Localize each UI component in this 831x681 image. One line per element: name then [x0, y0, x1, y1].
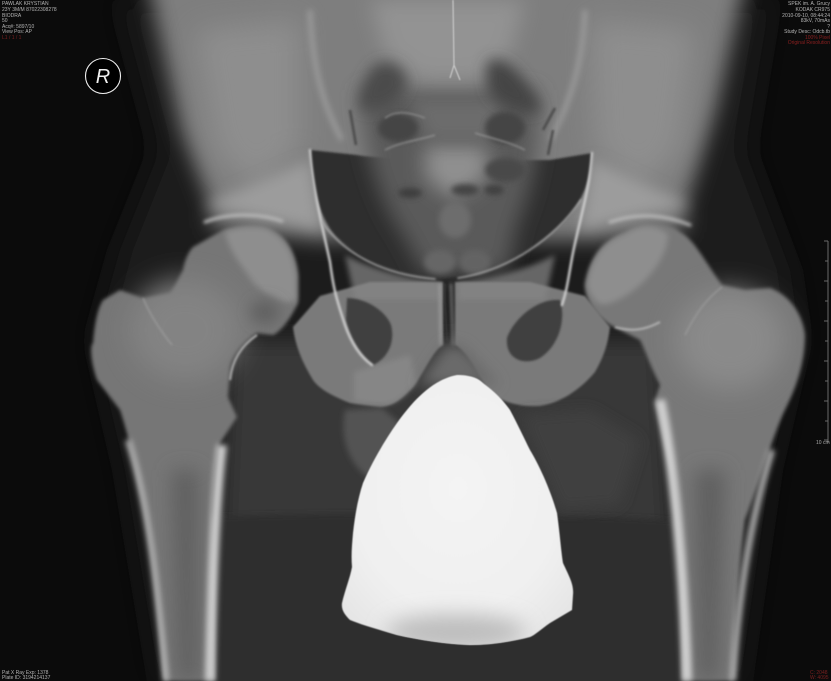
- left femur: [91, 225, 298, 681]
- patient information: BIODRA: [2, 13, 22, 19]
- study information: Study Desc: Odcb.tb: [784, 29, 830, 35]
- window level readout: W: 4095: [810, 675, 829, 681]
- patient information: Acq#: 5897/10: [2, 24, 34, 30]
- patient information: L1 / 1 / 1: [2, 35, 22, 41]
- bright cortical lines: [205, 150, 690, 365]
- pelvic inlet: [310, 150, 592, 278]
- exposure and plate information: Pat X Ray Exp: 1378: [2, 670, 49, 676]
- patient information: 50: [2, 18, 8, 24]
- right femur: [585, 224, 805, 681]
- gonadal lead shield: [342, 375, 573, 650]
- lower soft tissue shading: [343, 345, 640, 510]
- right side marker: R: [96, 66, 110, 88]
- window level readout: C: 2048: [810, 670, 828, 676]
- centimetre scale: [816, 241, 830, 446]
- exposure and plate information: Plate ID: 3194214137: [2, 675, 51, 681]
- sacrum and bowel: [350, 0, 555, 274]
- exposure and plate information: [2, 670, 51, 681]
- window level readout: [810, 670, 829, 681]
- study information: KODAK CR975: [796, 7, 830, 13]
- patient information: View Pos: AP: [2, 29, 33, 35]
- study information: 83kV, 70mAs: [801, 18, 830, 24]
- study information: 100% Pixel: [805, 35, 830, 41]
- study information: ?: [827, 24, 830, 30]
- iliac wings and upper pelvis: [145, 0, 748, 240]
- study information: [782, 1, 830, 46]
- study information: SPEK im. A. Grucy: [788, 1, 830, 7]
- patient information: PAWLAK KRYSTIAN: [2, 1, 49, 7]
- centimetre scale: 10 cm: [816, 440, 830, 446]
- patient information: [2, 1, 57, 41]
- study information: Original Resolution: [788, 40, 830, 46]
- patient information: 23Y 3M/M 87022308278: [2, 7, 57, 13]
- pubic and ischial rami: [293, 255, 610, 407]
- study information: 2010-09-10, 08:44:24: [782, 13, 830, 19]
- obturator foramina: [346, 298, 562, 365]
- right side marker: [86, 58, 120, 94]
